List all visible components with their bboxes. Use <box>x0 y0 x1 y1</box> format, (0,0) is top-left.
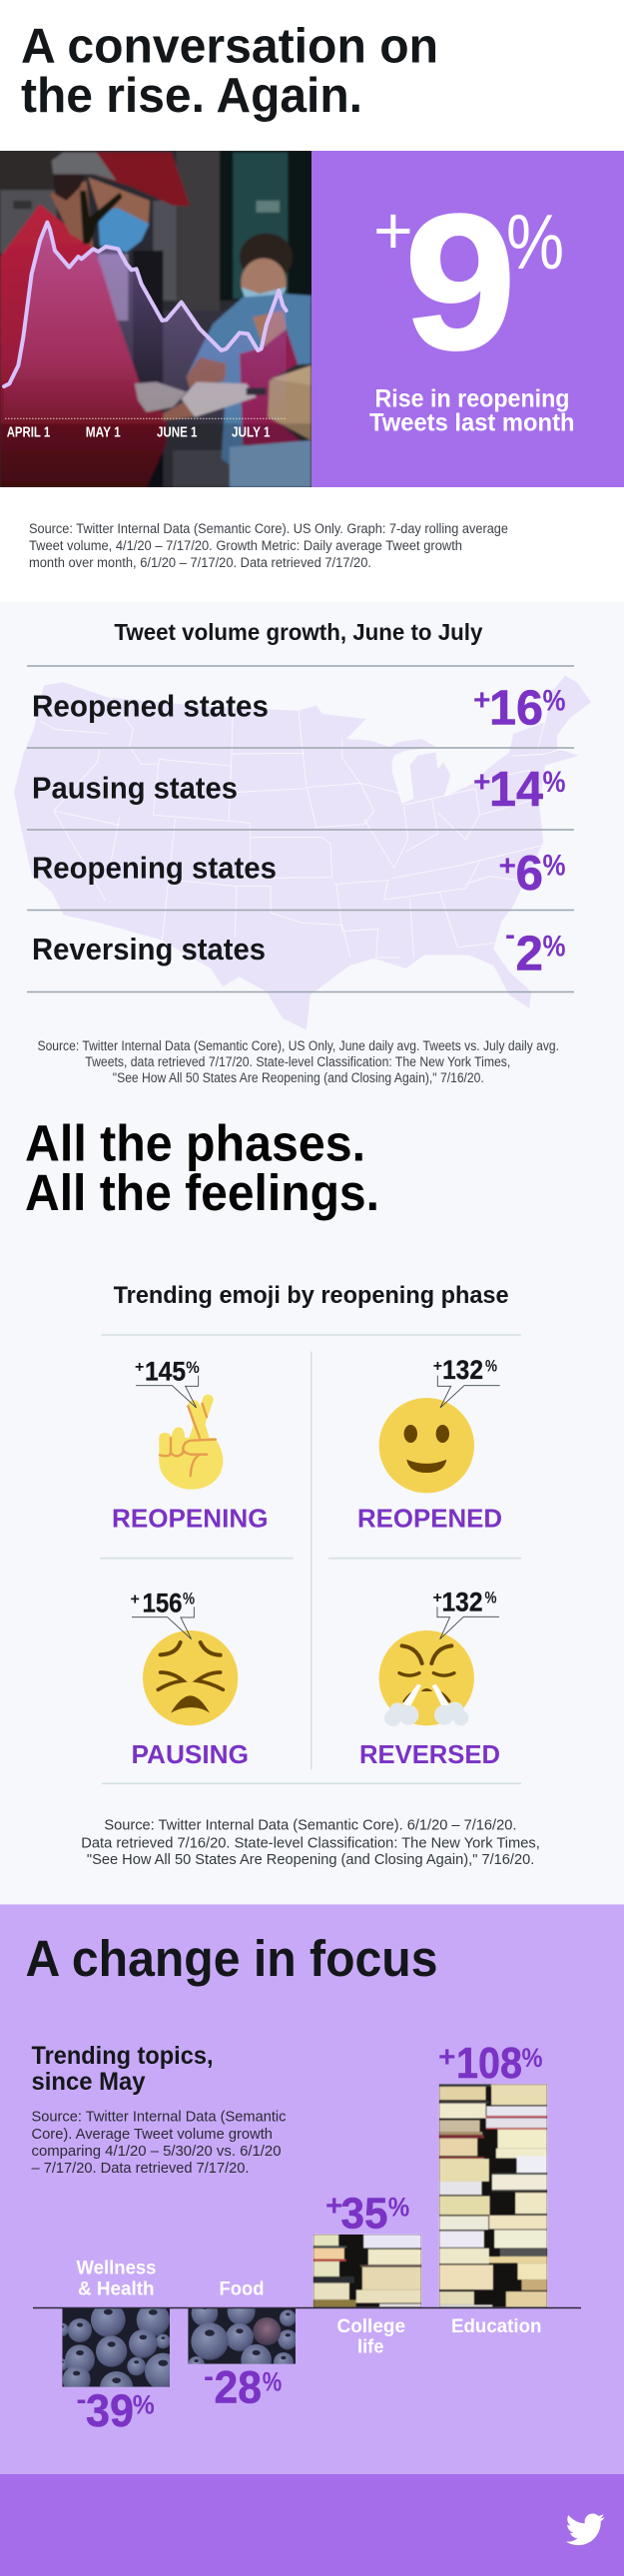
title: a conversation on the rise: the rise. Again. <box>21 69 362 123</box>
row: reversing states: % <box>543 931 565 964</box>
callout: +132%: + <box>433 1358 442 1375</box>
value: +35%: 35 <box>341 2190 387 2239</box>
source note 2: "See How All 50 States Are Reopening (and Closing Again)," 7/16/20. <box>113 1070 484 1085</box>
source note 4: Source: Twitter Internal Data (Semantic <box>32 2110 286 2126</box>
arm and hand <box>187 357 227 388</box>
chart: trending topics bars <box>33 2039 581 2436</box>
icon: twitter bird <box>566 2513 605 2545</box>
value: +35%: + <box>325 2190 343 2223</box>
value: +35%: % <box>388 2193 409 2223</box>
source note 1: Tweet volume, 4/1/20 – 7/17/20. Growth Metric: Daily average Tweet growth <box>29 538 462 553</box>
row: reopened states <box>32 681 565 735</box>
label: education: Education <box>451 2315 541 2337</box>
title: all the phases <box>25 1114 379 1221</box>
chart axis: APRIL 1 <box>7 425 50 441</box>
stat caption <box>369 385 575 437</box>
callout: +132% <box>433 1587 499 1639</box>
callout: +132% <box>433 1355 500 1408</box>
source note 4: comparing 4/1/20 – 5/30/20 vs. 6/1/20 <box>32 2144 282 2160</box>
icon: smiling face <box>379 1398 474 1493</box>
row: reversing states: - <box>505 919 515 952</box>
source note 4 <box>32 2110 286 2177</box>
chart axis: JUNE 1 <box>157 425 198 441</box>
chart axis: MAY 1 <box>86 425 121 441</box>
callout: +132%: + <box>433 1590 442 1607</box>
title: a conversation on the rise: A conversation on <box>21 19 438 73</box>
source note 3: "See How All 50 States Are Reopening (and Closing Again)," 7/16/20. <box>87 1852 534 1868</box>
stat caption: Tweets last month <box>369 409 575 437</box>
panel: photo with line chart <box>0 151 312 487</box>
row: reopening states: + <box>499 850 516 883</box>
map: United States <box>14 676 591 1030</box>
woman hair and face <box>239 233 294 274</box>
red jacket <box>0 204 167 487</box>
magenta top <box>240 328 304 445</box>
heading: trending topics: since May <box>32 2068 146 2096</box>
source note 4: – 7/17/20. Data retrieved 7/17/20. <box>32 2161 249 2177</box>
value: -28%: % <box>263 2366 282 2396</box>
heading: trending emoji: Trending emoji by reopening phase <box>114 1282 509 1309</box>
label: reopening: REOPENING <box>112 1504 268 1534</box>
label: reopened: REOPENED <box>357 1504 502 1534</box>
label: college life: College <box>337 2315 405 2337</box>
source note 3: Data retrieved 7/16/20. State-level Classification: The New York Times, <box>81 1835 540 1851</box>
title: all the phases: All the phases. <box>25 1114 365 1171</box>
panel: a change in focus <box>0 1904 624 2474</box>
row: reopened states: 16 <box>489 681 543 735</box>
row: reopening states: % <box>543 850 565 883</box>
label: wellness and health: Wellness <box>76 2256 157 2278</box>
face and mask <box>88 178 150 228</box>
source note 3 <box>81 1818 540 1868</box>
heading: trending topics: Trending topics, <box>32 2042 214 2070</box>
source note 1: month over month, 6/1/20 – 7/17/20. Data retrieved 7/17/20. <box>29 555 371 570</box>
page background <box>0 0 624 602</box>
callout: +145%: % <box>186 1358 200 1377</box>
callout: +145%: 145 <box>145 1356 186 1386</box>
row: pausing states <box>32 763 565 817</box>
row: reopened states: + <box>473 684 491 717</box>
row: reopened states: Reopened states <box>32 689 269 723</box>
row: reopened states: % <box>543 685 565 717</box>
stat: +9% <box>373 174 564 389</box>
gloves <box>135 382 187 412</box>
callout: +132%: 132 <box>441 1587 483 1616</box>
panel: light section background <box>0 602 624 1905</box>
row: reversing states: Reversing states <box>32 933 266 966</box>
callout: +132%: % <box>485 1356 497 1375</box>
chart axis <box>5 418 287 441</box>
stat: +9%: + <box>373 193 413 269</box>
title: a conversation on the rise <box>21 19 438 123</box>
denim shirt <box>187 294 312 472</box>
photo: delivery scene <box>0 151 312 487</box>
source note 2 <box>38 1038 559 1085</box>
value: -28%: - <box>204 2360 214 2393</box>
title: a change in focus: A change in focus <box>26 1930 437 1987</box>
box <box>268 367 312 440</box>
value: +108%: % <box>521 2043 543 2073</box>
heading: trending topics <box>32 2042 214 2096</box>
panel: reversed emoji <box>359 1587 500 1769</box>
value: -39%: % <box>133 2389 155 2419</box>
source note 1: Source: Twitter Internal Data (Semantic Core). US Only. Graph: 7-day rolling average <box>29 521 508 536</box>
value: -39%: 39 <box>86 2385 134 2436</box>
stat: +9%: 9 <box>404 174 516 389</box>
callout: +156%: + <box>130 1592 140 1608</box>
row: pausing states: Pausing states <box>32 771 238 805</box>
label: college life <box>337 2315 405 2358</box>
dark lower shade <box>0 423 312 487</box>
bar: wellness blueberries <box>62 2308 170 2387</box>
row: reopening states: 6 <box>515 847 543 901</box>
label: pausing: PAUSING <box>132 1739 249 1769</box>
neck and hair <box>50 181 93 248</box>
helmet <box>96 151 191 208</box>
panel: +9% stat <box>312 151 624 487</box>
icon: crossed fingers <box>159 1400 223 1490</box>
row: reversing states <box>32 919 565 981</box>
callout: +156%: % <box>183 1590 195 1609</box>
callout: +145% <box>135 1356 200 1408</box>
callout: +132%: % <box>485 1588 497 1607</box>
stat caption: Rise in reopening <box>375 385 569 413</box>
row: reversing states: 2 <box>515 928 543 981</box>
icon: face with steam <box>379 1630 474 1726</box>
row: pausing states: 14 <box>489 763 543 817</box>
source note 4: Core). Average Tweet volume growth <box>32 2127 273 2143</box>
value: +108%: + <box>438 2041 456 2074</box>
label: reversed: REVERSED <box>359 1739 500 1769</box>
label: food: Food <box>220 2277 264 2299</box>
label: wellness and health <box>76 2256 157 2299</box>
callout: +156% <box>130 1588 195 1639</box>
panel: reopening emoji <box>112 1356 268 1534</box>
axis line <box>33 2306 581 2308</box>
table: tweet volume rows <box>27 666 574 992</box>
callout: +132%: 132 <box>442 1355 483 1385</box>
footer band <box>0 2474 624 2576</box>
chart axis: JULY 1 <box>232 425 270 441</box>
row: pausing states: % <box>543 766 565 799</box>
value: -39%: - <box>76 2383 86 2416</box>
value: -28% <box>204 2360 282 2413</box>
line chart: rolling average <box>4 223 287 386</box>
panel: pausing emoji <box>130 1588 249 1769</box>
title: all the phases: All the feelings. <box>25 1164 379 1221</box>
source note 1 <box>29 521 508 570</box>
icon: persevering face <box>143 1630 238 1725</box>
callout: +145%: + <box>135 1359 144 1376</box>
panel: reopened emoji <box>357 1355 502 1534</box>
purple wash under line <box>4 223 287 417</box>
value: +108%: 108 <box>456 2039 522 2088</box>
source note 2: Tweets, data retrieved 7/17/20. State-level Classification: The New York Times, <box>85 1054 510 1069</box>
row: pausing states: + <box>473 766 491 799</box>
value: +35% <box>325 2190 409 2239</box>
label: wellness and health: & Health <box>78 2277 154 2299</box>
bar: education books <box>439 2085 547 2307</box>
row: reopening states: Reopening states <box>32 851 277 885</box>
callout: +156%: 156 <box>142 1588 182 1617</box>
row: reopening states <box>32 847 565 901</box>
heading: tweet volume growth: Tweet volume growth, June to July <box>114 619 483 645</box>
jeans <box>230 440 312 487</box>
value: -28%: 28 <box>214 2362 262 2413</box>
stat: +9%: % <box>506 198 564 286</box>
source note 3: Source: Twitter Internal Data (Semantic Core). 6/1/20 – 7/16/20. <box>104 1818 516 1834</box>
grid dividers <box>100 1335 521 1783</box>
bar: college life books <box>313 2235 421 2307</box>
strap <box>80 191 123 244</box>
value: -39% <box>76 2383 155 2436</box>
source note 2: Source: Twitter Internal Data (Semantic Core), US Only, June daily avg. Tweets vs. July daily avg. <box>38 1038 559 1053</box>
bar: food blueberries <box>188 2308 296 2364</box>
label: college life: life <box>357 2336 384 2358</box>
